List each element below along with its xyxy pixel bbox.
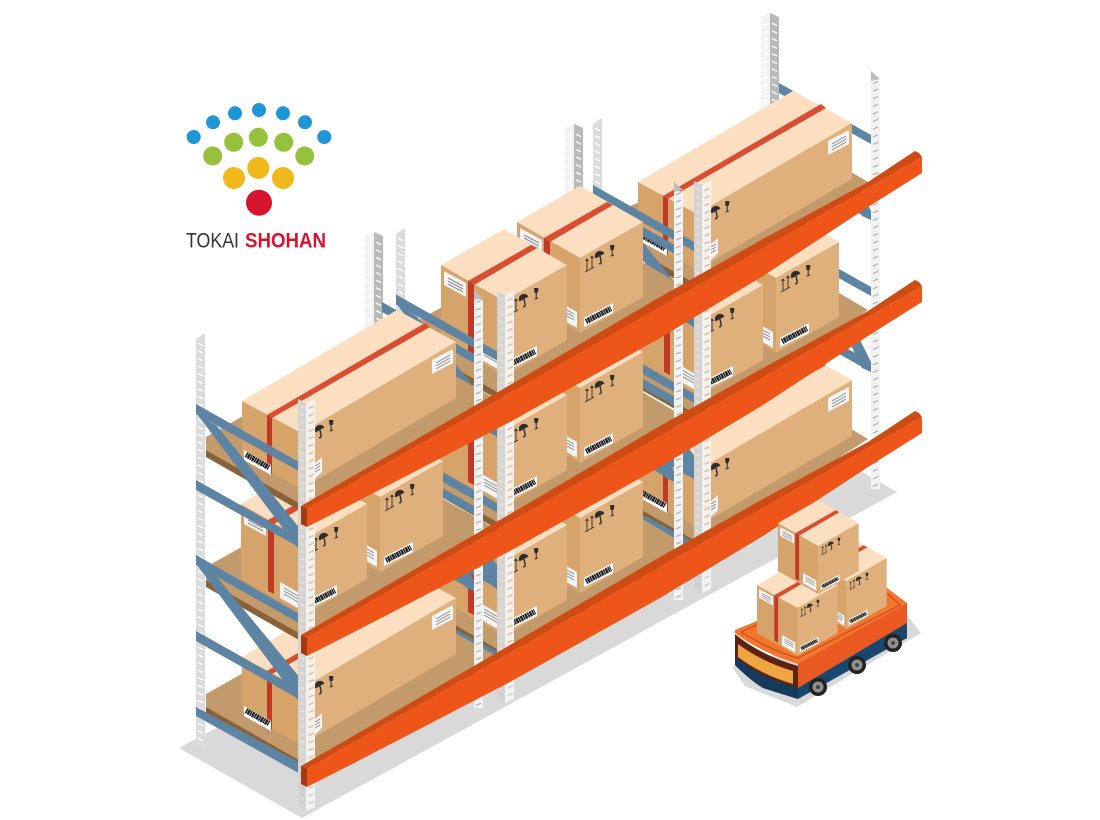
vehicle front bumper — [735, 634, 798, 688]
vehicle shadow — [732, 615, 921, 707]
logo wordmark: TOKAI — [186, 228, 239, 252]
logo green dots — [203, 128, 314, 166]
side frame 1 — [196, 404, 306, 776]
shelf bay 1 with boxes — [206, 310, 496, 770]
logo blue dots — [187, 103, 331, 144]
automated guided vehicle carrying boxes — [732, 500, 921, 707]
rear uprights — [196, 13, 779, 750]
logo wordmark: SHOHAN — [245, 228, 326, 252]
stacked boxes — [757, 500, 887, 656]
vehicle top deck — [735, 585, 907, 664]
vehicle side panel — [798, 603, 907, 688]
wheels — [809, 634, 902, 696]
logo red dot — [246, 190, 272, 216]
orange beam bottom — [301, 411, 922, 787]
side frame 2 — [396, 294, 506, 666]
front uprights — [298, 71, 880, 811]
cross braces at second upright — [382, 302, 474, 591]
cross braces at third upright — [582, 192, 674, 482]
logo yellow dots — [223, 157, 294, 189]
rear cross braces at right end — [779, 83, 871, 372]
logo: Tokai Shohan — [186, 103, 331, 252]
side frame 3 — [593, 185, 703, 557]
orange beam top — [301, 151, 922, 527]
floor shadow — [179, 425, 897, 818]
shelf bay 3 with boxes — [603, 91, 868, 552]
vehicle chassis — [735, 620, 907, 699]
shelf bay 2 with boxes — [406, 186, 693, 661]
vehicle front light — [738, 644, 793, 684]
orange beam middle — [301, 280, 922, 656]
